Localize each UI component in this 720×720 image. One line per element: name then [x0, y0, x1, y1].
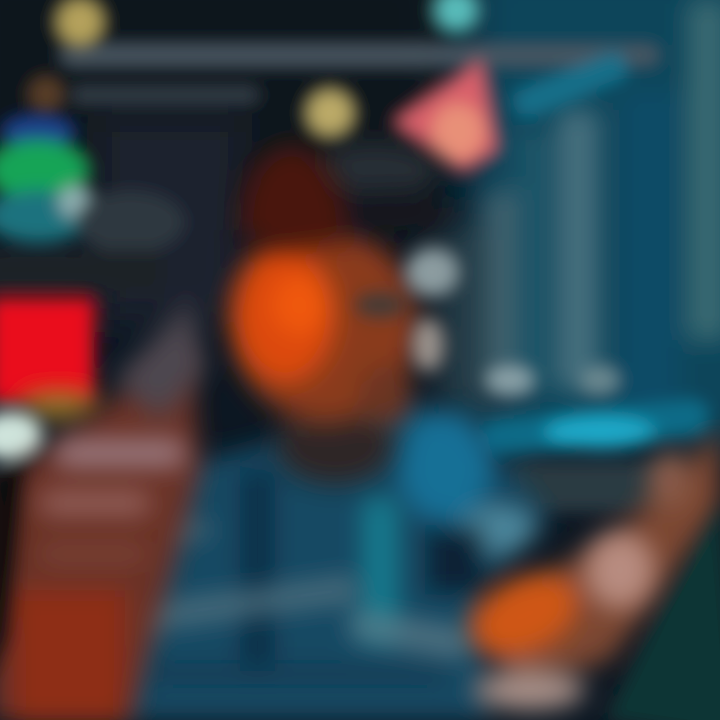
- torso: blue plaid shirt: [120, 400, 550, 720]
- cap: [240, 142, 465, 250]
- cyan counter light: [479, 366, 711, 512]
- red sign: [0, 298, 94, 402]
- bokeh lights: [28, 0, 478, 137]
- forearm and hand: [459, 430, 720, 710]
- white-teal patch: [0, 412, 42, 460]
- face: [233, 227, 417, 423]
- lower right dark teal corner: [605, 500, 720, 720]
- background: dark room and teal building: [0, 0, 720, 440]
- left side colored signs: [0, 116, 185, 460]
- plaid stripes: [128, 520, 472, 683]
- neck: [275, 405, 395, 485]
- glasses and face highlight: [354, 248, 458, 371]
- left shoulder: red-brown striped sleeve: [0, 340, 200, 720]
- pink triangular light: [392, 58, 498, 172]
- man figure: [0, 142, 550, 720]
- headline band: blurred text lines: [60, 44, 660, 121]
